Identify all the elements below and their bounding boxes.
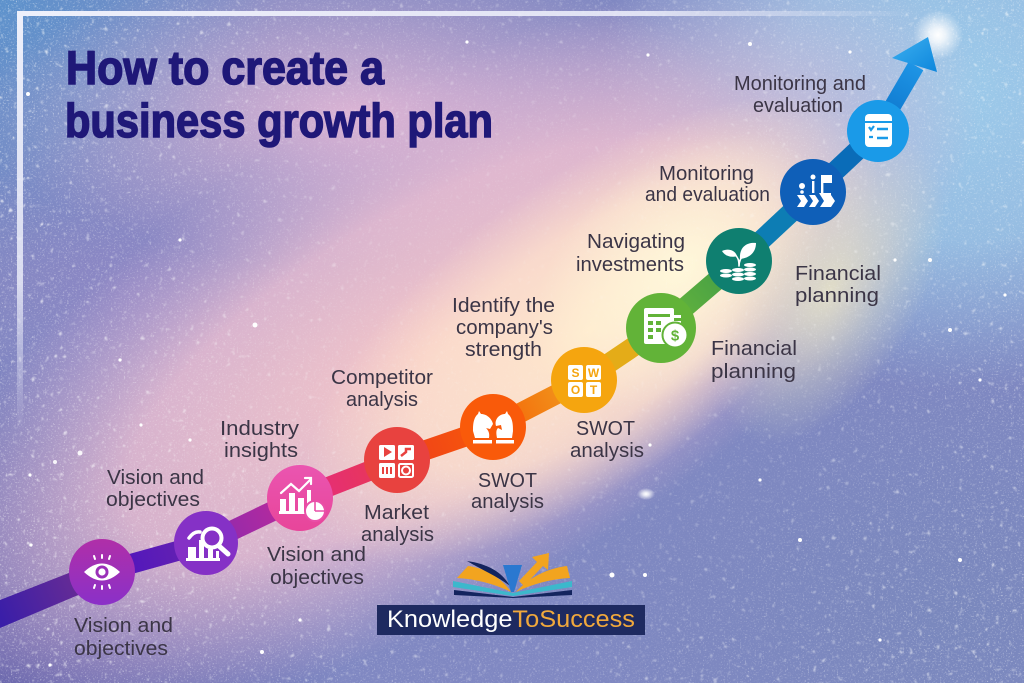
label: step 6: SWOT <box>576 417 635 440</box>
label: step 8 <box>795 262 881 307</box>
step 10: monitoring checklist <box>847 100 909 162</box>
label: step 8: Financial <box>795 262 881 285</box>
icon: chevrons and flag <box>797 174 835 207</box>
icon: market grid <box>379 445 414 478</box>
logo: open book with arrows <box>453 553 572 598</box>
icon: swot grid: W <box>588 366 600 380</box>
step 1: vision <box>69 539 135 605</box>
label: step 7 bottom <box>711 337 797 383</box>
label: step 9 <box>645 162 770 206</box>
icon: eye <box>84 555 120 589</box>
label: step 5 bottom <box>471 469 544 513</box>
arrow head <box>892 37 937 72</box>
label: step 4 bottom: Market <box>364 501 429 524</box>
growth arrow line <box>0 66 916 628</box>
label: step 1 <box>74 614 173 660</box>
label: step 3 bottom: Vision and <box>267 543 366 566</box>
label: step 7 bottom: Financial <box>711 337 797 360</box>
label: step 1: objectives <box>74 637 168 660</box>
icon: checklist <box>865 114 892 147</box>
step 8: navigating investments <box>706 228 772 294</box>
title <box>65 41 493 147</box>
label: step 7 bottom: planning <box>711 360 796 383</box>
step 5: competition <box>460 394 526 460</box>
label: step 3 top: insights <box>224 439 298 462</box>
label: step 10 <box>734 72 866 117</box>
label: step 5 bottom: analysis <box>471 490 544 513</box>
label: step 7 top: investments <box>576 253 684 276</box>
icon: swot grid <box>568 365 601 397</box>
icon: plant and coins <box>720 243 756 281</box>
icon: swot grid: S <box>571 366 580 380</box>
label: step 7 top <box>576 230 685 276</box>
label: step 5 top: company's <box>456 316 553 339</box>
step 2: magnifier <box>174 511 238 575</box>
label: step 5 top <box>452 294 555 361</box>
icon: swot grid: T <box>590 383 598 397</box>
step 6: swot <box>551 347 617 413</box>
label: step 2 <box>106 466 204 511</box>
label: step 6 <box>570 417 644 462</box>
label: step 5 top: Identify the <box>452 294 555 317</box>
label: step 4 bottom <box>361 501 434 546</box>
step 7: financial planning <box>626 293 696 363</box>
frame: top and left lines <box>17 11 917 431</box>
step 4: market <box>364 427 430 493</box>
logo banner: Knowledge ToSuccess <box>387 606 635 633</box>
icon: calculator and dollar: $ <box>671 328 680 344</box>
label: step 1: Vision and <box>74 614 173 637</box>
label: step 5 bottom: SWOT <box>478 469 537 492</box>
step 9: strategy <box>780 159 846 225</box>
label: step 9: Monitoring <box>659 162 754 185</box>
icon: bar chart and pie <box>279 478 325 521</box>
step 3: chart <box>267 465 333 531</box>
label: step 4 top: Competitor <box>331 366 433 389</box>
label: step 10: Monitoring and <box>734 72 866 95</box>
label: step 2: objectives <box>106 488 200 511</box>
title: business growth plan <box>65 94 493 147</box>
label: step 3 bottom <box>267 543 366 589</box>
label: step 10: evaluation <box>753 94 843 117</box>
label: step 4 bottom: analysis <box>361 523 434 546</box>
label: step 3 top <box>220 417 300 462</box>
label: step 3 top: Industry <box>220 417 300 440</box>
label: step 6: analysis <box>570 439 644 462</box>
label: step 5 top: strength <box>465 338 542 361</box>
icon: chess knights <box>473 411 514 444</box>
label: step 3 bottom: objectives <box>270 566 364 589</box>
label: step 7 top: Navigating <box>587 230 685 253</box>
label: step 2: Vision and <box>107 466 204 489</box>
label: step 4 top <box>331 366 433 411</box>
icon: swot grid: O <box>571 383 580 397</box>
glow at arrow tip <box>913 10 963 60</box>
label: step 9: and evaluation <box>645 183 770 206</box>
title: How to create a <box>66 41 385 94</box>
label: step 4 top: analysis <box>346 388 418 411</box>
label: step 8: planning <box>795 284 879 307</box>
icon: chart and magnifier <box>186 528 228 561</box>
